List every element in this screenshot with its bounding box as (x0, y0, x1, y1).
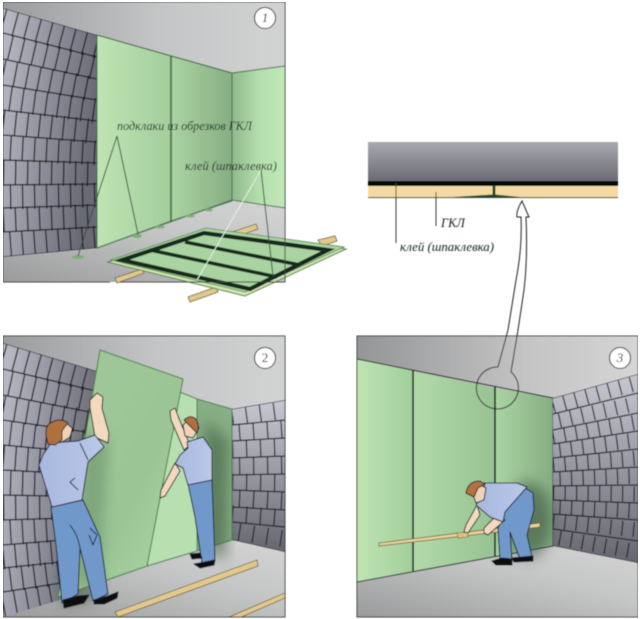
back wall sheets, panel 2 (147, 390, 232, 566)
shadow behind the lifted sheet (54, 570, 96, 611)
step number 2: 2 (262, 350, 268, 365)
shoes (190, 553, 215, 568)
leader: glue (395, 183, 397, 243)
shadow of worker 3 (504, 482, 552, 558)
trouser folds (70, 525, 97, 548)
label: glue: клей (шпаклевка) (185, 159, 277, 173)
spacer pads from drywall offcuts (72, 208, 213, 259)
ceiling and floor, panel 1 (3, 2, 285, 282)
shoes (63, 592, 118, 608)
head and hair (472, 484, 486, 503)
shirt folds (70, 443, 88, 490)
panel 2: lifting a sheet onto the wall (3, 336, 285, 619)
step number 1: 1 (262, 10, 268, 25)
step number 2 (254, 348, 276, 368)
shirt (476, 483, 527, 522)
straight-edge batten (379, 523, 540, 546)
trousers (188, 480, 215, 563)
ceiling and floor, panel 3 (357, 336, 638, 617)
raised arm (90, 393, 109, 443)
head and hair (183, 418, 199, 438)
label: drywall: ГКЛ (440, 216, 466, 230)
leader lines, panel 1 (78, 136, 273, 280)
head and hair (60, 424, 73, 442)
lifted green drywall sheet (58, 350, 183, 597)
step number 3 (610, 348, 630, 368)
panel 2 frame (3, 336, 285, 617)
green drywall sheets on back wall (97, 35, 285, 248)
shirt (39, 435, 104, 507)
ceiling and floor, panel 2 (3, 336, 285, 617)
trousers (498, 488, 534, 561)
label: spacer pads: подклаки из обрезков ГКЛ (117, 119, 253, 133)
glue layer (368, 181, 618, 186)
drywall layer (368, 186, 618, 197)
arms (464, 505, 505, 535)
green sheets, panel 3 (357, 359, 553, 582)
drywall sheet with glue strips (108, 228, 346, 296)
right brick wall, panel 3 (553, 374, 638, 563)
right brick wall, panel 2 (232, 400, 285, 552)
detail: wall cross-section (368, 142, 618, 254)
panel 3 frame (357, 336, 638, 617)
shirt (175, 437, 212, 485)
floor battens, panel 2 (115, 560, 285, 619)
panel 1: preparing sheets and gluing (3, 2, 346, 302)
label: glue: клей (шпаклевка) (400, 240, 494, 254)
shoes (492, 556, 533, 565)
sheet shading (75, 430, 108, 590)
worker 3 (464, 481, 534, 565)
leader: drywall (435, 192, 437, 226)
raised and lowered arms (160, 408, 190, 498)
panel 1 frame (3, 2, 285, 282)
worker 2 (160, 408, 215, 568)
shadow of second worker (205, 420, 228, 560)
step number 3: 3 (616, 350, 624, 365)
masonry wall (368, 142, 618, 181)
brick wall, panel 1 (3, 8, 97, 257)
left brick wall, panel 2 (3, 343, 100, 617)
step number 1 (254, 8, 276, 28)
worker 1 (39, 393, 118, 608)
trousers (51, 500, 108, 603)
magnifier circle and callout arrow (476, 201, 529, 409)
panel 3: levelling the sheets with a straight edge (357, 336, 638, 617)
joint with putty (368, 186, 618, 198)
wooden battens under the sheet (115, 224, 337, 302)
